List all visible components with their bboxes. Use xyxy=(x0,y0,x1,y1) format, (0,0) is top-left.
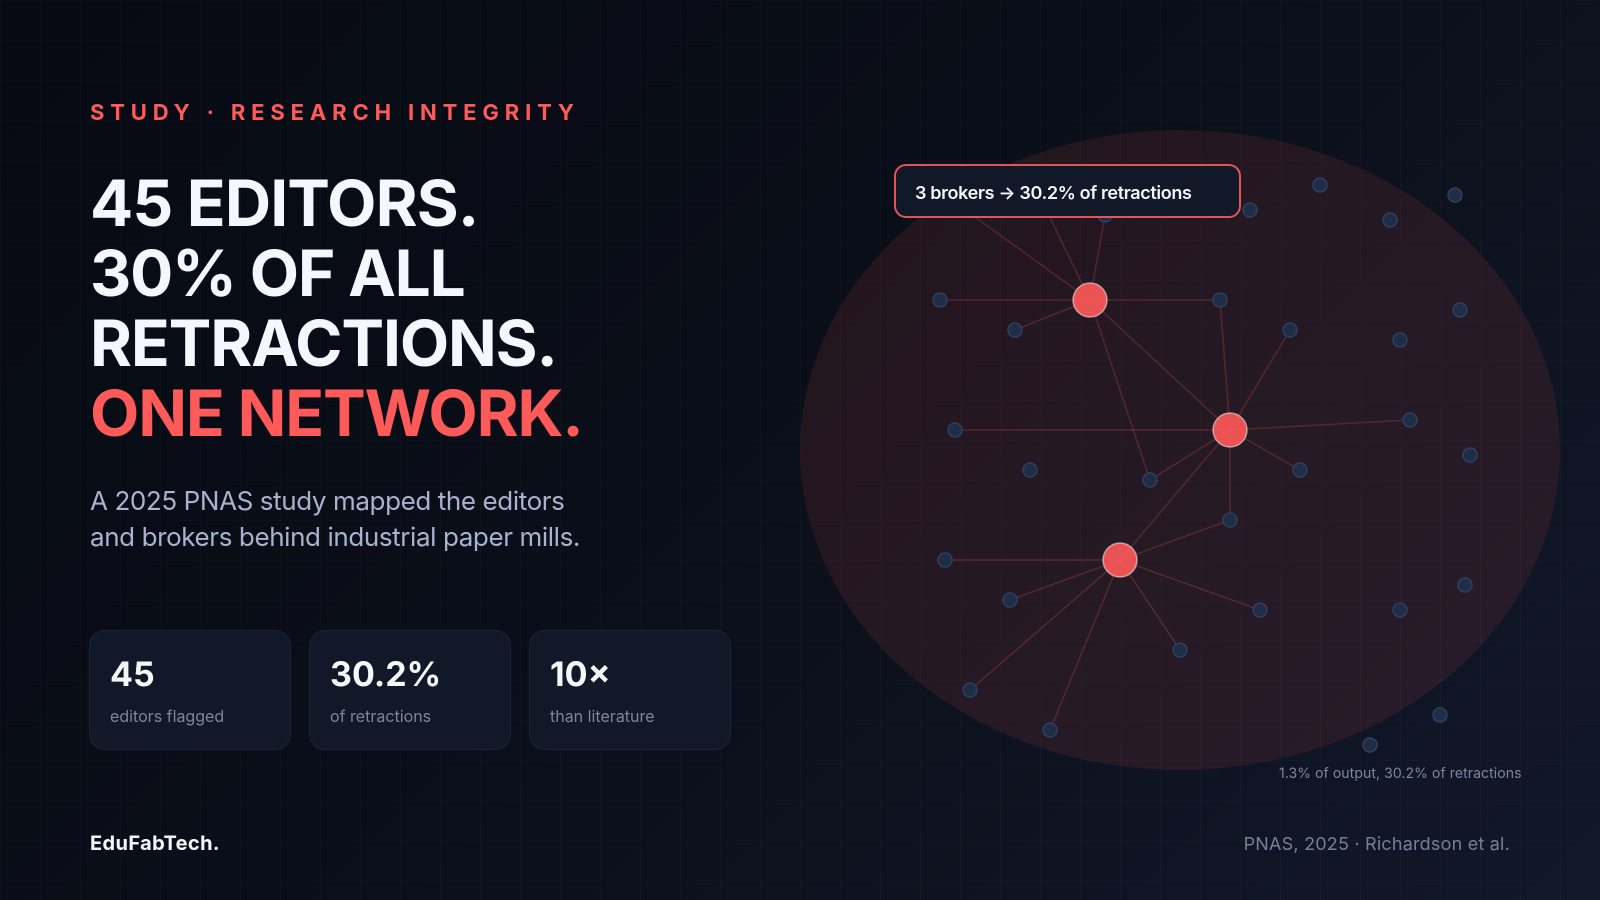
title xyxy=(90,165,583,452)
stat card: than literature: than literature xyxy=(550,706,655,726)
stat card: than literature xyxy=(529,630,731,750)
callout xyxy=(894,164,1241,218)
title: 30% OF ALL xyxy=(90,235,465,312)
network region ellipse xyxy=(800,130,1560,770)
title: RETRACTIONS. xyxy=(90,305,557,382)
subtitle text: and brokers behind industrial paper mills. xyxy=(90,522,580,553)
stat card: share of retractions: 30.2% xyxy=(330,654,441,695)
callout: 3 brokers → 30.2% of retractions xyxy=(915,183,1192,204)
stat card: editors flagged xyxy=(89,630,291,750)
brand: EduFabTech. xyxy=(90,831,220,855)
stat card: share of retractions: of retractions xyxy=(330,706,431,726)
stat card: than literature: 10× xyxy=(550,654,611,695)
source: PNAS, 2025 · Richardson et al. xyxy=(1244,834,1510,855)
subtitle text: A 2025 PNAS study mapped the editors xyxy=(90,486,564,517)
eyebrow label: STUDY · RESEARCH INTEGRITY xyxy=(90,100,580,126)
stat card: editors flagged: editors flagged xyxy=(110,706,224,726)
peripheral nodes xyxy=(933,178,1477,752)
stat card: editors flagged: 45 xyxy=(110,654,155,695)
annotation note: 1.3% of output, 30.2% of retractions xyxy=(1279,765,1522,782)
stat card: share of retractions xyxy=(309,630,511,750)
broker hub nodes xyxy=(1073,283,1247,577)
title: 45 EDITORS. xyxy=(90,165,478,242)
title: ONE NETWORK. xyxy=(90,375,583,452)
network edges xyxy=(940,197,1410,730)
subtitle text xyxy=(90,486,580,553)
